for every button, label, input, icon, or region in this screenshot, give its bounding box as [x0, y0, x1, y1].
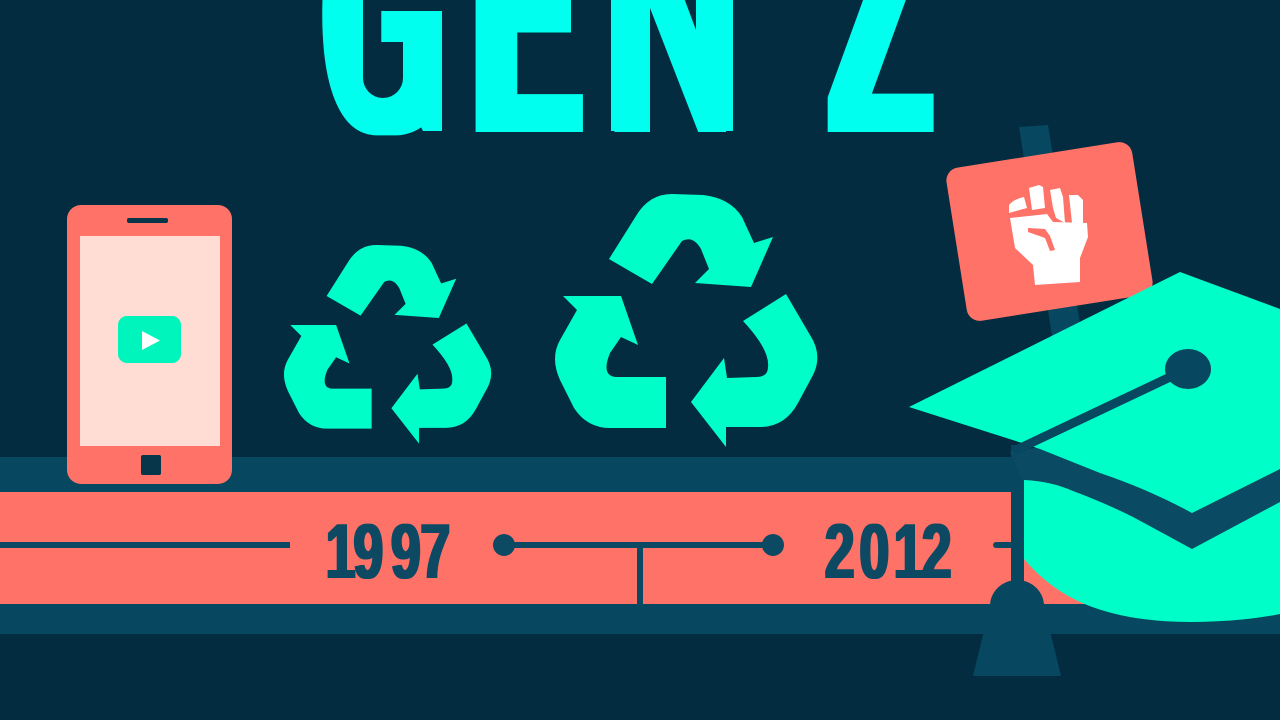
cap stand — [973, 445, 1061, 676]
icon: large recycling symbol — [555, 194, 817, 447]
sign board — [945, 140, 1154, 323]
icon: video play button — [118, 316, 181, 363]
tassel button — [1165, 349, 1211, 389]
icon: graduation cap and stand — [909, 272, 1280, 676]
icon: small recycling symbol — [284, 245, 491, 444]
timeline connectors — [0, 534, 1013, 605]
cap shadow band — [1010, 447, 1280, 552]
timeline band — [0, 457, 1280, 634]
cap skull — [1024, 480, 1280, 622]
icon: smartphone — [67, 205, 232, 484]
mortarboard — [909, 272, 1280, 513]
sign pole — [1019, 125, 1081, 336]
year: 2012: 2012 — [825, 509, 952, 596]
tassel cord — [1014, 369, 1187, 451]
icon: raised fist — [1009, 185, 1088, 285]
year: 1997: 1997 — [326, 509, 450, 596]
icon: protest sign — [945, 125, 1154, 336]
